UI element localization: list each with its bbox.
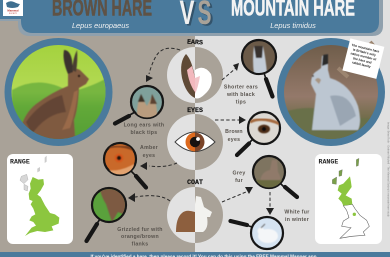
caption: grizzled fur: orange/brown [121, 234, 159, 240]
magnifier: amber eyes [104, 143, 146, 188]
map: Great Britain all green [20, 156, 59, 236]
caption: grey fur: fur [235, 178, 243, 184]
footer bar [0, 252, 390, 257]
caption: amber eyes [140, 145, 158, 159]
icon: brown hare ear [181, 54, 195, 98]
heading: coat: COAT [187, 179, 203, 186]
arrow: eyes to amber eyes [140, 162, 177, 170]
photo: brown hare in ring [4, 38, 112, 150]
callout note: only native member: native member of [350, 51, 378, 62]
caption: brown eyes: eyes [228, 137, 240, 143]
caption: long ears: Long ears with [124, 122, 164, 128]
panel: eyes circle [167, 114, 223, 170]
magnifier: brown eyes [237, 112, 280, 155]
caption: white fur in winter: White fur [284, 210, 310, 216]
caption: grizzled fur [117, 227, 163, 248]
callout note: only native member: the hare and [353, 56, 372, 65]
panel: coat circle [167, 187, 223, 243]
icon: rabbit white half [195, 196, 212, 232]
caption: shorter ears: with black [226, 92, 255, 98]
map: Great Britain with green Scotland [332, 158, 369, 238]
caption: white fur in winter [284, 210, 310, 223]
photo: mountain hare in ring [277, 38, 385, 146]
heading: ears: EARS [187, 39, 203, 46]
panel: ears circle [167, 47, 223, 103]
heading: eyes: EYES [187, 107, 203, 114]
subtitle: Lepus europaeus: Lepus europaeus [72, 21, 129, 30]
magnifier: grey fur [253, 156, 297, 197]
caption: white fur in winter: in winter [285, 217, 309, 223]
caption: amber eyes: Amber [140, 145, 158, 151]
callout note: only native member [338, 38, 384, 79]
caption: shorter ears: tips [236, 100, 246, 106]
caption: amber eyes: eyes [143, 153, 155, 159]
arrow: ears to long ears [146, 48, 180, 82]
panel: mountain hare range map [315, 154, 382, 244]
caption: shorter ears: Shorter ears [224, 84, 258, 90]
callout note: only native member: is Britain's only [352, 48, 377, 57]
icon: mountain hare ear [195, 68, 212, 98]
heading: range: RANGE [318, 158, 338, 166]
background: right light half [195, 0, 390, 257]
caption: long ears [124, 122, 164, 136]
heading: range: RANGE [10, 158, 30, 166]
subtitle: Lepus timidus: Lepus timidus [270, 21, 316, 30]
logo: Mammal Society: Mammal [7, 8, 19, 12]
caption: shorter ears [224, 84, 258, 106]
callout note: only native member: The mountain hare [351, 43, 380, 54]
magnifier: long ears [115, 86, 163, 124]
arrow: coat to grizzled fur [128, 193, 170, 202]
caption: brown eyes: Brown [225, 129, 243, 135]
caption: grizzled fur: Grizzled fur with [117, 227, 163, 233]
arrow: coat to grey fur [222, 187, 253, 202]
caption: grey fur [232, 170, 246, 184]
magnifier: grizzled fur [86, 188, 128, 241]
background: left beige half [0, 0, 195, 257]
icon: rabbit brown half [176, 211, 195, 232]
magnifier: shorter ears [242, 40, 276, 96]
header banner [0, 0, 383, 36]
caption: brown eyes [225, 129, 243, 143]
caption: grey fur: Grey [232, 170, 246, 176]
icon: eye [175, 132, 215, 152]
logo: Mammal Society [3, 0, 23, 16]
caption: long ears: black tips [131, 130, 157, 136]
vertical image credits: Image: Brian Ruth · Graham Mitchell · The Mammal Society's mountain hare study [386, 122, 390, 217]
logo: Mammal Society: SOCIETY [9, 13, 18, 15]
arrow: ears to shorter ears [222, 63, 239, 80]
panel: brown hare range map [7, 154, 73, 244]
caption: grizzled fur: flanks [132, 242, 148, 248]
arrow: eyes to brown eyes [215, 116, 246, 124]
VS heading [180, 0, 214, 34]
callout note: only native member: rabbit family [352, 60, 371, 69]
arrow: grey fur to white fur [266, 192, 274, 215]
magnifier: white fur [230, 217, 283, 249]
